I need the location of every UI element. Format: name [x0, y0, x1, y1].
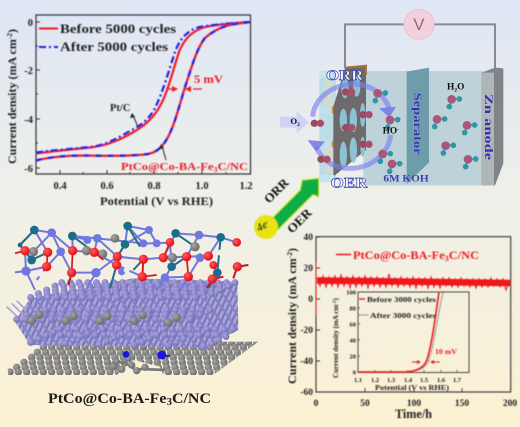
- inset ticks: [358, 308, 457, 372]
- nitrogen dopant atoms: [123, 351, 170, 359]
- inset y tick labels: 60: [350, 322, 356, 328]
- x axis tick labels: 200: [503, 399, 517, 409]
- separator: [407, 68, 429, 184]
- carbon sheet: [8, 342, 258, 375]
- cycle arrow: OER: [308, 135, 391, 168]
- inset y axis title: Current density (mA cm: [333, 307, 340, 378]
- y axis title: Current density (mA cm: [7, 44, 19, 164]
- inset y tick labels: 20: [350, 354, 356, 360]
- y axis title: -2: [285, 252, 294, 258]
- label: ORR on cathode: ORR: [326, 68, 364, 84]
- inset x tick labels: 1.1: [354, 377, 362, 384]
- x axis tick labels: [53, 181, 253, 192]
- atomic structure model: [6, 222, 260, 376]
- inset x tick labels: 1.7: [453, 377, 462, 384]
- catalyst name caption: PtCo@Co-BA-Fe: [48, 391, 156, 407]
- x axis tick labels: 1.2: [239, 181, 253, 192]
- Zn anode: [482, 68, 503, 185]
- inset x tick labels: 1.2: [371, 377, 379, 384]
- battery schematic: [280, 9, 503, 192]
- y axis tick labels: -2: [24, 66, 33, 77]
- y axis tick labels: -40: [300, 357, 313, 367]
- inset y tick labels: 0: [353, 370, 356, 376]
- label: OER on cathode: OER: [331, 176, 368, 192]
- label: H2O: 2: [454, 87, 457, 93]
- inset y tick labels: 40: [350, 338, 356, 344]
- PtCo surface bonds network: [15, 222, 248, 290]
- carbide gray atoms: [27, 310, 181, 327]
- y axis title: -2: [6, 33, 14, 39]
- legend: C/NC: [449, 248, 479, 262]
- annotation: 5 mV shift: [168, 74, 224, 92]
- Pt/C curve before: [36, 22, 250, 154]
- separator: Separator: [411, 93, 423, 155]
- y axis tick labels: -60: [300, 388, 313, 398]
- inset y axis title: ): [333, 298, 340, 300]
- label: Pt/C: [110, 103, 138, 127]
- middle plane atoms: [13, 306, 213, 323]
- plot frame: [36, 15, 250, 174]
- legend: after: After 5000 cycles: [60, 40, 168, 54]
- axis ticks: [316, 237, 462, 392]
- inset x tick labels: 1.4: [404, 377, 413, 384]
- x axis tick labels: [314, 399, 517, 409]
- inset y tick labels: 80: [350, 306, 356, 312]
- y axis tick labels: -6: [24, 164, 33, 175]
- inset x tick labels: 1.3: [387, 377, 396, 384]
- oxygen molecules: [311, 88, 373, 163]
- Zn anode: Zn anode: [482, 94, 496, 161]
- y axis tick labels: [24, 18, 34, 175]
- label: HO-: -: [397, 126, 399, 132]
- inset x tick labels: [354, 377, 462, 384]
- inset y axis title: -2: [333, 300, 338, 305]
- label: O2: 2: [297, 122, 300, 128]
- PtCo curve after: [36, 22, 250, 160]
- legend: [336, 248, 479, 263]
- label: Pt/C: Pt/C: [110, 103, 130, 114]
- chart: ORR polarization curves: [6, 15, 253, 208]
- chart: long term stability: [285, 233, 517, 421]
- cycle arrow: ORR: [313, 84, 396, 117]
- axis ticks: [36, 22, 226, 174]
- annotation: 5 mV shift: 5 mV: [194, 74, 224, 86]
- y axis tick labels: -4: [24, 115, 34, 126]
- inset x axis title: Potential (V vs RHE): [375, 384, 450, 392]
- label: ORR: ORR: [261, 175, 292, 206]
- label: PtCo@Co-BA-Fe3C/NC: 3: [213, 166, 218, 174]
- voltmeter: V: [413, 15, 425, 34]
- inset curve after: [358, 292, 443, 372]
- label: PtCo@Co-BA-Fe3C/NC: PtCo@Co-BA-Fe: [121, 162, 199, 173]
- x axis tick labels: 0.4: [53, 181, 67, 192]
- top plane atoms: [27, 279, 238, 301]
- label: PtCo@Co-BA-Fe3C/NC: C/NC: [218, 162, 248, 173]
- Pt/C curve after: [36, 22, 250, 152]
- inset annotation: 10 mV: 10 mV: [435, 348, 458, 356]
- y axis tick labels: 0: [308, 295, 313, 305]
- inset legend after: After 3000 cycles: [370, 312, 436, 320]
- oxygen inlet arrow: [280, 111, 309, 133]
- inset x tick labels: 1.6: [437, 377, 446, 384]
- x axis tick labels: 1.0: [195, 181, 209, 192]
- voltmeter: [404, 9, 434, 39]
- y axis title: Current density (mA cm: [285, 259, 299, 384]
- y axis tick labels: -20: [300, 326, 313, 336]
- y axis tick labels: [300, 233, 313, 398]
- x axis tick labels: 0: [314, 399, 319, 409]
- y axis title: ): [7, 29, 19, 33]
- inset y tick labels: [346, 290, 356, 376]
- x axis tick labels: 50: [360, 399, 370, 409]
- x axis tick labels: 150: [455, 399, 469, 409]
- y axis tick labels: 20: [304, 264, 313, 274]
- hydroxide and water molecules: [372, 89, 478, 174]
- inset y tick labels: 100: [346, 290, 356, 296]
- yellow 4e- badge: [254, 215, 278, 239]
- PtCo curve before: [36, 22, 250, 160]
- y axis tick labels: 0: [28, 18, 33, 29]
- x axis title: Time/h: [395, 407, 432, 421]
- x axis tick labels: 0.8: [147, 181, 161, 192]
- inset curve before: [358, 292, 439, 372]
- legend: 3: [445, 254, 449, 263]
- yellow 4e- badge: -: [264, 217, 271, 226]
- inset chart: OER polarization: [333, 290, 469, 392]
- current density trace: [316, 262, 510, 315]
- catalyst name caption: 3: [166, 397, 172, 408]
- y axis title: ): [285, 248, 299, 252]
- inset legend before: Before 3000 cycles: [367, 296, 436, 304]
- x axis tick labels: 100: [407, 399, 421, 409]
- catalyst name caption: C/NC: [172, 391, 211, 407]
- inset x tick labels: 1.5: [420, 377, 429, 384]
- electrolyte body: [363, 71, 483, 185]
- x axis tick labels: 0.6: [100, 181, 114, 192]
- label: PtCo@Co-BA-Fe3C/NC: [121, 144, 248, 174]
- label: H2O: H: [447, 82, 454, 92]
- label: O2: O: [290, 116, 297, 126]
- label: H2O: O: [457, 82, 464, 92]
- inset frame: [358, 292, 469, 372]
- legend: before: Before 5000 cycles: [60, 22, 176, 36]
- plot frame: [316, 237, 511, 392]
- purple Fe3C layer: [7, 278, 238, 350]
- air cathode: [319, 66, 366, 182]
- carbon sheet lower strand: [110, 343, 165, 374]
- yellow 4e- badge: 4e: [254, 219, 270, 235]
- front bottom plane atoms: [27, 329, 229, 350]
- back bottom plane atoms: [48, 326, 236, 338]
- legend: PtCo@Co-BA-Fe: [353, 248, 442, 262]
- label: HO-: HO: [383, 126, 397, 136]
- green reversible arrow: [254, 175, 319, 239]
- y axis tick labels: 40: [304, 233, 313, 243]
- label: 6M KOH: 6M KOH: [383, 174, 430, 184]
- label: OER: OER: [284, 205, 315, 236]
- x axis title: Potential (V vs RHE): [100, 196, 213, 208]
- external circuit wire: [345, 24, 495, 68]
